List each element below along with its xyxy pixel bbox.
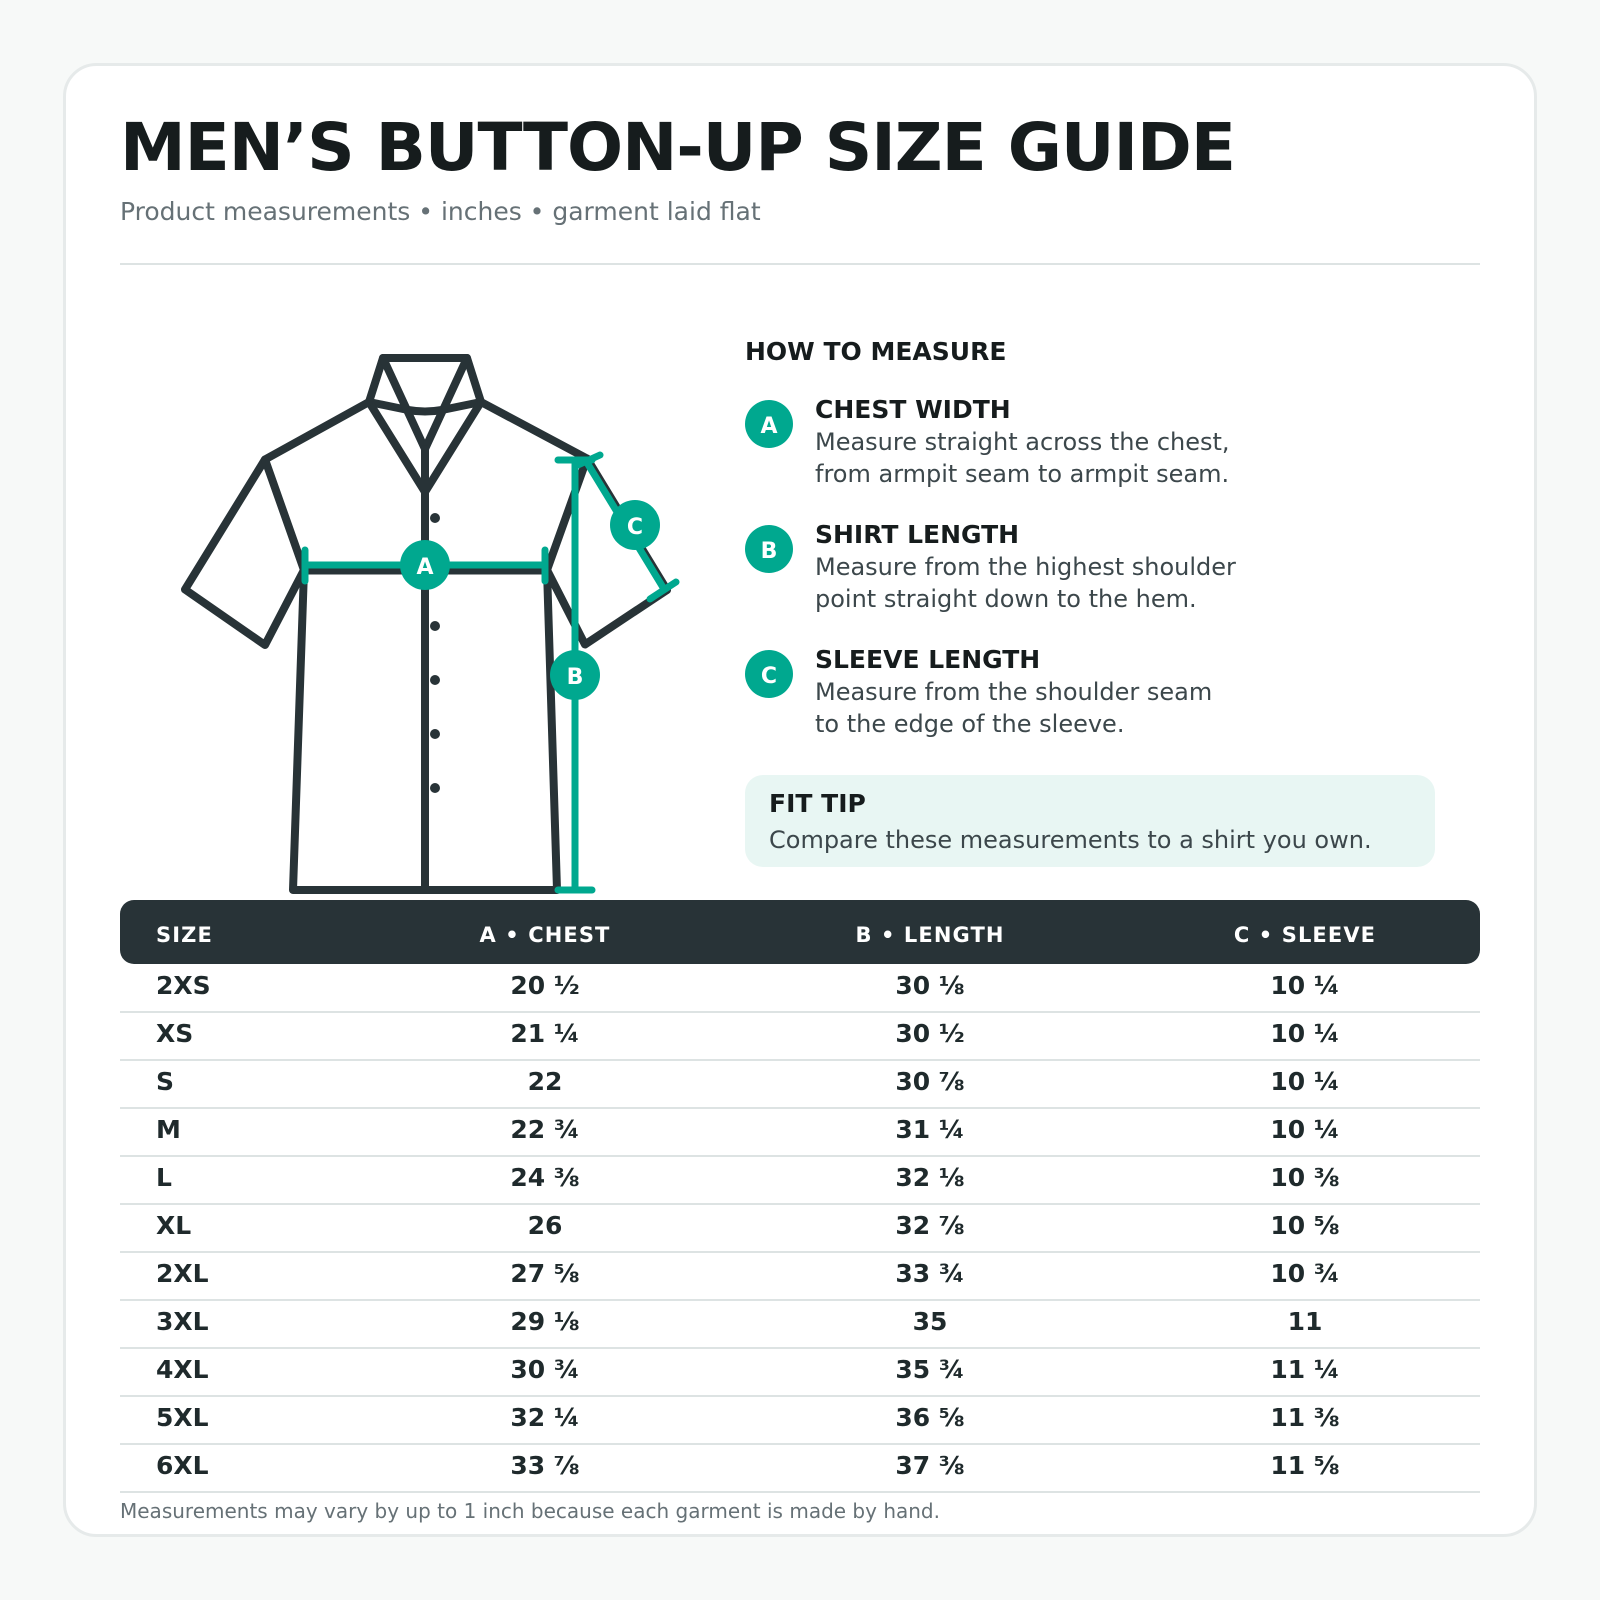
row 4XL: 30 ¾ [510,1355,580,1384]
row L: 24 ⅜ [510,1163,580,1192]
row 3XL: 35 [913,1307,947,1336]
row M: M [156,1115,181,1144]
footnote: Measurements may vary by up to 1 inch because each garment is made by hand. [120,1499,940,1523]
step B: point straight down to the hem. [815,585,1197,613]
step C: to the edge of the sleeve. [815,710,1124,738]
row 6XL: 37 ⅜ [895,1451,965,1480]
row 2XL [156,1259,1340,1288]
row XL: 10 ⅝ [1270,1211,1340,1240]
measure A: chest [305,540,545,590]
table header [120,900,1480,964]
fit tip callout: Compare these measurements to a shirt you own. [769,826,1372,854]
step A: from armpit seam to armpit seam. [815,460,1229,488]
row M: 31 ¼ [895,1115,965,1144]
row XL [156,1211,1340,1240]
row 5XL: 36 ⅝ [895,1403,965,1432]
table header: C • SLEEVE [1234,923,1376,947]
row L: 32 ⅛ [895,1163,965,1192]
row S: 22 [528,1067,562,1096]
row 2XL: 10 ¾ [1270,1259,1340,1288]
row L: 10 ⅜ [1270,1163,1340,1192]
step C: C [761,664,777,689]
row S [156,1067,1340,1096]
row 5XL: 5XL [156,1403,209,1432]
step C: Measure from the shoulder seam [815,678,1212,706]
shirt buttons [430,513,440,793]
row 6XL [156,1451,1340,1480]
row XS: 21 ¼ [510,1019,580,1048]
row 4XL: 4XL [156,1355,209,1384]
step C [745,645,1212,738]
how to measure heading: HOW TO MEASURE [745,337,1006,366]
table header: B • LENGTH [855,923,1005,947]
measure B: length [550,460,600,890]
row 2XS: 30 ⅛ [895,971,965,1000]
row XS: 30 ½ [895,1019,965,1048]
row 5XL: 11 ⅜ [1270,1403,1340,1432]
row XS [156,1019,1340,1048]
row XS: 10 ¼ [1270,1019,1340,1048]
row 2XS: 10 ¼ [1270,971,1340,1000]
subtitle: Product measurements • inches • garment laid flat [120,197,761,226]
row 4XL: 11 ¼ [1270,1355,1340,1384]
row M [156,1115,1340,1144]
fit tip callout [745,775,1435,867]
row M: 22 ¾ [510,1115,580,1144]
row 2XL: 2XL [156,1259,209,1288]
row 3XL: 11 [1288,1307,1322,1336]
step B: SHIRT LENGTH [815,520,1019,549]
row 2XS: 20 ½ [510,971,580,1000]
step C: SLEEVE LENGTH [815,645,1040,674]
row 2XL: 33 ¾ [895,1259,965,1288]
step B: Measure from the highest shoulder [815,553,1236,581]
row 5XL [156,1403,1340,1432]
row M: 10 ¼ [1270,1115,1340,1144]
title: MEN’S BUTTON-UP SIZE GUIDE [120,109,1235,186]
row XS: XS [156,1019,193,1048]
step A: A [760,414,778,439]
row 5XL: 32 ¼ [510,1403,580,1432]
shirt diagram [185,358,676,890]
table header: A • CHEST [480,923,610,947]
row 2XL: 27 ⅝ [510,1259,580,1288]
shirt outline [185,358,667,890]
size table [120,900,1480,1492]
row 3XL: 29 ⅛ [510,1307,580,1336]
step A: Measure straight across the chest, [815,428,1230,456]
row 4XL [156,1355,1340,1384]
row L [156,1163,1340,1192]
measure C: sleeve: C [627,515,643,540]
step B [745,520,1236,613]
row 3XL [156,1307,1322,1336]
row 2XS [156,971,1340,1000]
row S: 30 ⅞ [895,1067,965,1096]
row S: S [156,1067,174,1096]
step A: CHEST WIDTH [815,395,1011,424]
measure B: length: B [567,665,583,690]
step A [745,395,1230,488]
row 6XL: 33 ⅞ [510,1451,580,1480]
row 6XL: 6XL [156,1451,209,1480]
row XL: 26 [528,1211,562,1240]
row 6XL: 11 ⅝ [1270,1451,1340,1480]
fit tip callout: FIT TIP [769,789,866,818]
table header: SIZE [156,923,213,947]
step B: B [761,539,777,564]
row S: 10 ¼ [1270,1067,1340,1096]
measure C: sleeve [578,455,676,599]
row 2XS: 2XS [156,971,211,1000]
row 4XL: 35 ¾ [895,1355,965,1384]
row XL: XL [156,1211,191,1240]
measure A: chest: A [416,555,434,580]
row XL: 32 ⅞ [895,1211,965,1240]
row L: L [156,1163,172,1192]
row 3XL: 3XL [156,1307,209,1336]
